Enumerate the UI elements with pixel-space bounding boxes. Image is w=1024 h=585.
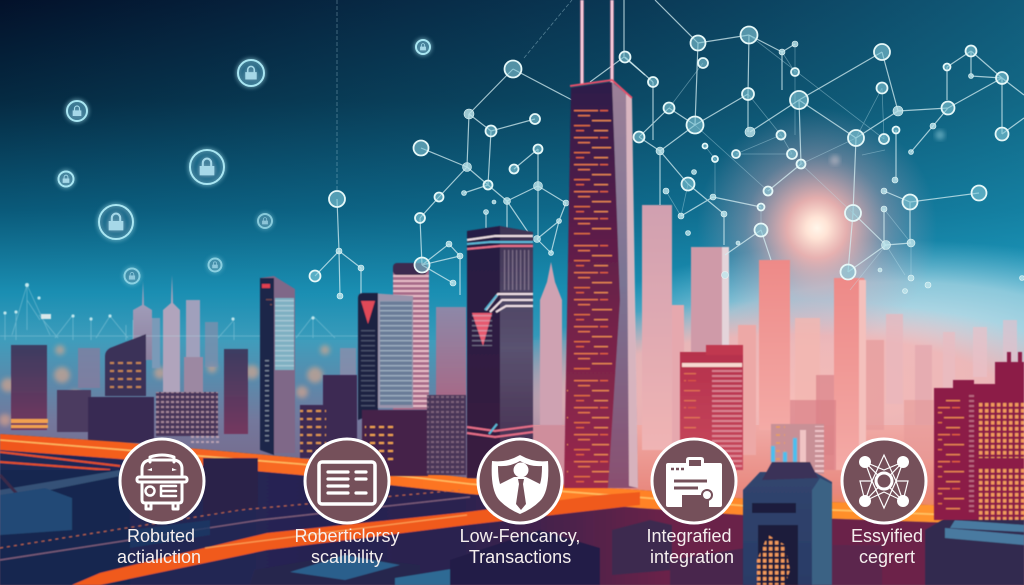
lock 6 — [258, 214, 272, 228]
label: Integrafied — [646, 526, 732, 546]
lock 1 — [238, 60, 264, 86]
left towers foreground — [260, 0, 1024, 520]
ground and highways — [0, 434, 1024, 585]
lock 7 — [208, 258, 222, 272]
lock 2 — [67, 101, 87, 121]
distant centre towers — [436, 307, 466, 397]
upper orange highway — [0, 434, 1024, 525]
distant skyline — [0, 205, 1017, 491]
label: Low-Fencancy, — [460, 526, 580, 546]
badge: integration — [646, 439, 736, 567]
glass tower — [358, 293, 428, 476]
badge: scalability — [294, 439, 400, 567]
lock 3 — [190, 150, 224, 184]
lock 8 — [124, 268, 140, 284]
tall dark slab tower — [260, 276, 295, 455]
network graph: centre cluster — [310, 0, 645, 299]
pale left towers — [133, 281, 152, 360]
pink striped tower — [393, 263, 429, 410]
glass crown — [771, 424, 824, 474]
badge: low latency — [460, 439, 580, 567]
lock 4 — [58, 172, 74, 186]
label: scalibility — [311, 547, 383, 567]
lock 9 — [416, 40, 430, 54]
label: Robuted — [127, 526, 195, 546]
icon: data panel — [319, 462, 375, 504]
main skyscraper with antennas — [564, 0, 638, 488]
central blue tower with digital panel — [743, 424, 832, 585]
big dark tower with stripes — [467, 226, 533, 478]
network graph: right cluster — [620, 0, 1024, 294]
icon: shield with keyhole tie — [492, 455, 548, 514]
badge: network mesh — [842, 439, 926, 567]
left bokeh city lights — [0, 345, 330, 426]
left horizon mini network — [0, 283, 360, 340]
thin red road — [0, 452, 120, 470]
icon: robot bus — [137, 455, 187, 509]
dark stepped block — [300, 375, 357, 458]
icon: document device — [666, 457, 722, 507]
label: cegrert — [859, 547, 915, 567]
label: actialiction — [117, 547, 201, 567]
rooftops — [203, 458, 258, 515]
label: integration — [650, 547, 734, 567]
left dark towers — [11, 345, 47, 430]
lower grey block — [427, 395, 466, 475]
lower orange highway — [72, 492, 640, 585]
label: Transactions — [469, 547, 571, 567]
pink salmon towers — [642, 205, 672, 450]
icon: mesh nodes — [859, 455, 909, 508]
badge: robust — [117, 439, 204, 567]
floating lock icons — [58, 40, 430, 284]
right code block building — [934, 352, 1024, 520]
lock 5 — [99, 205, 133, 239]
red code tower — [680, 345, 743, 470]
label: Roberticlorsy — [294, 526, 400, 546]
label: Essyified — [851, 526, 923, 546]
